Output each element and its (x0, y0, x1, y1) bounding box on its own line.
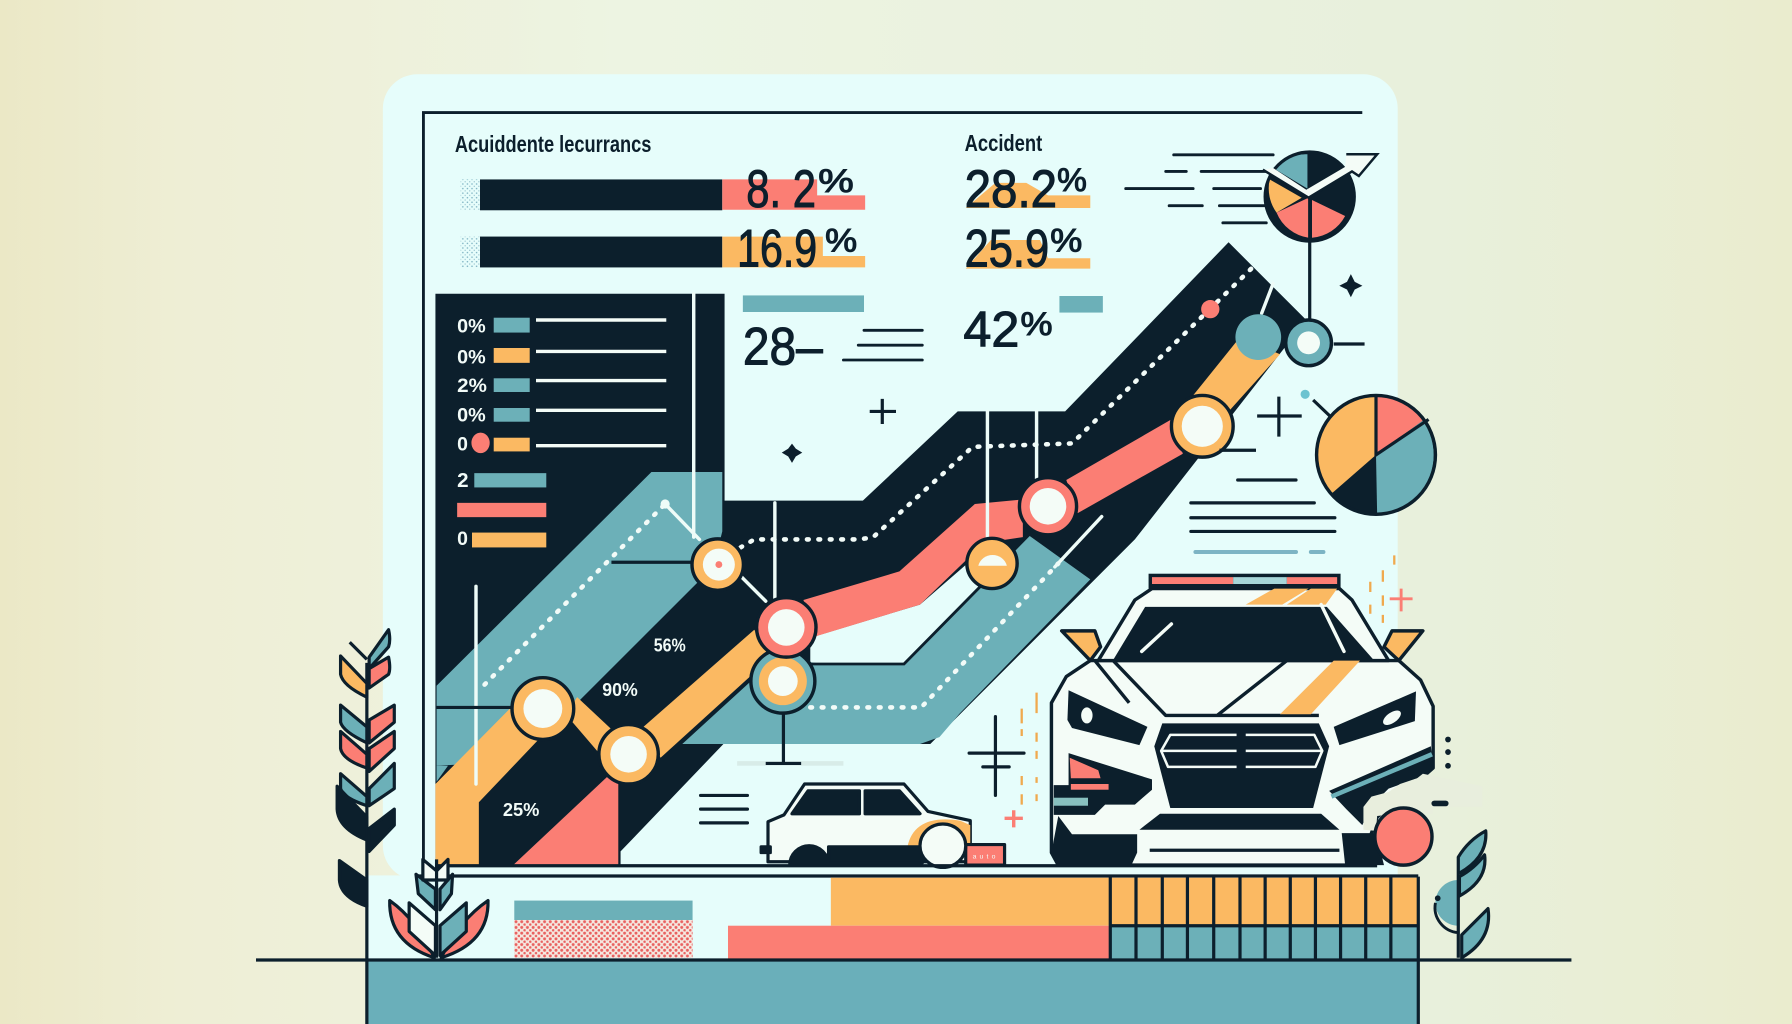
large car (1051, 574, 1482, 865)
lower band: teal and hatch swatch (514, 901, 693, 958)
cross and dashes left of car (969, 693, 1037, 827)
chart: coral line (803, 499, 1023, 637)
windshield (1113, 607, 1374, 660)
left mirror (1062, 631, 1101, 661)
roof stripes (1246, 589, 1337, 605)
base teal block (367, 961, 1418, 1024)
text rules under pie two (1191, 480, 1335, 552)
chart percent labels: 56% (654, 634, 686, 655)
stat: 28.2%: 28.2 (965, 160, 1057, 219)
chart: coral line upper segment (1066, 419, 1183, 513)
left vent (1054, 753, 1152, 815)
small teal dot (1301, 390, 1310, 399)
bottom sprout plant (390, 859, 488, 958)
hood lines (1095, 661, 1319, 715)
panel: lower shelf (367, 875, 1418, 960)
panel: main card (383, 74, 1398, 880)
marker: orange 1 (512, 678, 574, 739)
car cab (1098, 589, 1389, 661)
heading: right: Accident (965, 130, 1043, 156)
chart: upper teal band (437, 472, 722, 766)
stat bar: 16.9%: 16.9 (737, 219, 817, 278)
three rules by small car (701, 795, 747, 823)
stat: 25.9%: 25.9 (965, 219, 1049, 278)
stat: 28 with rules: 28– (743, 318, 824, 377)
shelf lines (417, 866, 1418, 876)
stat: 28 with rules (743, 295, 922, 377)
marker: coral 2 (1019, 478, 1077, 535)
stat bar: 8.2%: % (818, 163, 854, 199)
stat bar: 16.9% (461, 219, 865, 278)
chart: dark mountain area (435, 242, 1306, 865)
bumper band (1139, 814, 1339, 830)
chart percent labels: 90% (602, 679, 638, 700)
marker: orange 2 (599, 725, 658, 784)
chart: lower teal band (682, 536, 1090, 744)
dotted trend lines (485, 266, 1254, 707)
lower band: grid (1110, 877, 1417, 960)
white connector lines (476, 283, 1273, 784)
chart: coral wedge (513, 777, 618, 865)
chart: orange line left segments (435, 630, 771, 865)
right wheel block (1342, 833, 1384, 865)
bumper line (1150, 849, 1339, 852)
legend on dark panel: 2 (457, 469, 469, 492)
car body (1051, 661, 1433, 865)
legend on dark panel: 0% (457, 405, 486, 427)
stat bar: 8.2%: 8. 2 (746, 160, 816, 219)
coral wheel (1375, 808, 1432, 865)
stat bar: 8.2% (461, 160, 865, 219)
legend on dark panel (457, 316, 666, 550)
legend on dark panel: 2% (457, 375, 487, 397)
chart: outline of pale gap (810, 586, 981, 664)
smoke cloud (1363, 774, 1482, 831)
orange dashes and plus right of car (1370, 555, 1413, 623)
pie chart with arrow (1263, 152, 1377, 242)
stat: 28.2%: % (1057, 162, 1087, 198)
left headlight (1067, 690, 1147, 745)
legend on dark panel: 0 (457, 528, 468, 550)
marker: teal ring (1286, 320, 1331, 366)
stat bar: 16.9%: % (825, 222, 857, 258)
stat: 25.9%: % (1050, 222, 1082, 258)
left plant (337, 630, 394, 906)
legend on dark panel: 0% (457, 316, 486, 338)
marker: teal solid (1235, 314, 1281, 360)
right headlight (1334, 691, 1416, 745)
marker: teal and orange behind coral (751, 649, 815, 713)
frame lines (423, 113, 1362, 869)
ground and base lines (256, 663, 1571, 1024)
marker: coral 1 (757, 598, 816, 657)
right plant (1435, 831, 1489, 958)
marker: coral dot (1201, 300, 1219, 318)
chart: orange line upper segment (1193, 337, 1280, 434)
left wheel block (1051, 816, 1137, 865)
chart: pale gap under the coral line (810, 560, 983, 664)
dots and dash right of car (1434, 739, 1448, 803)
small car (761, 784, 1005, 867)
decorative plus and sparkles (783, 275, 1361, 462)
chart percent labels: 25% (503, 799, 539, 820)
legend on dark panel: 0 (457, 433, 468, 455)
stat: 42%: 42 (963, 300, 1019, 357)
stat: 42% (963, 296, 1103, 357)
chart percent labels (503, 634, 686, 820)
rule lines beside pie 1 (1126, 155, 1273, 223)
right mirror (1384, 631, 1423, 661)
legend on dark panel: 0% (457, 346, 486, 368)
roof bar (1149, 574, 1341, 589)
stat: 42%: % (1021, 306, 1053, 342)
small car: auto (973, 853, 996, 860)
dark marker lines (437, 562, 712, 707)
marker: orange 4 (1171, 395, 1233, 457)
windshield highlights (1142, 605, 1344, 651)
pie chart two (1317, 395, 1435, 514)
lower band: orange and coral blocks (728, 878, 1110, 959)
right vent (1329, 746, 1433, 825)
hood stripe (1280, 661, 1360, 714)
grille (1154, 723, 1329, 808)
chart: small teal corner (437, 766, 448, 782)
marker: orange 3 (692, 539, 743, 590)
pie connector lines (1219, 242, 1365, 450)
marker: orange half (967, 538, 1017, 589)
stem under teal marker (737, 714, 843, 766)
white node dot (661, 499, 670, 509)
heading: left: Acuiddente lecurrancs (455, 131, 651, 157)
